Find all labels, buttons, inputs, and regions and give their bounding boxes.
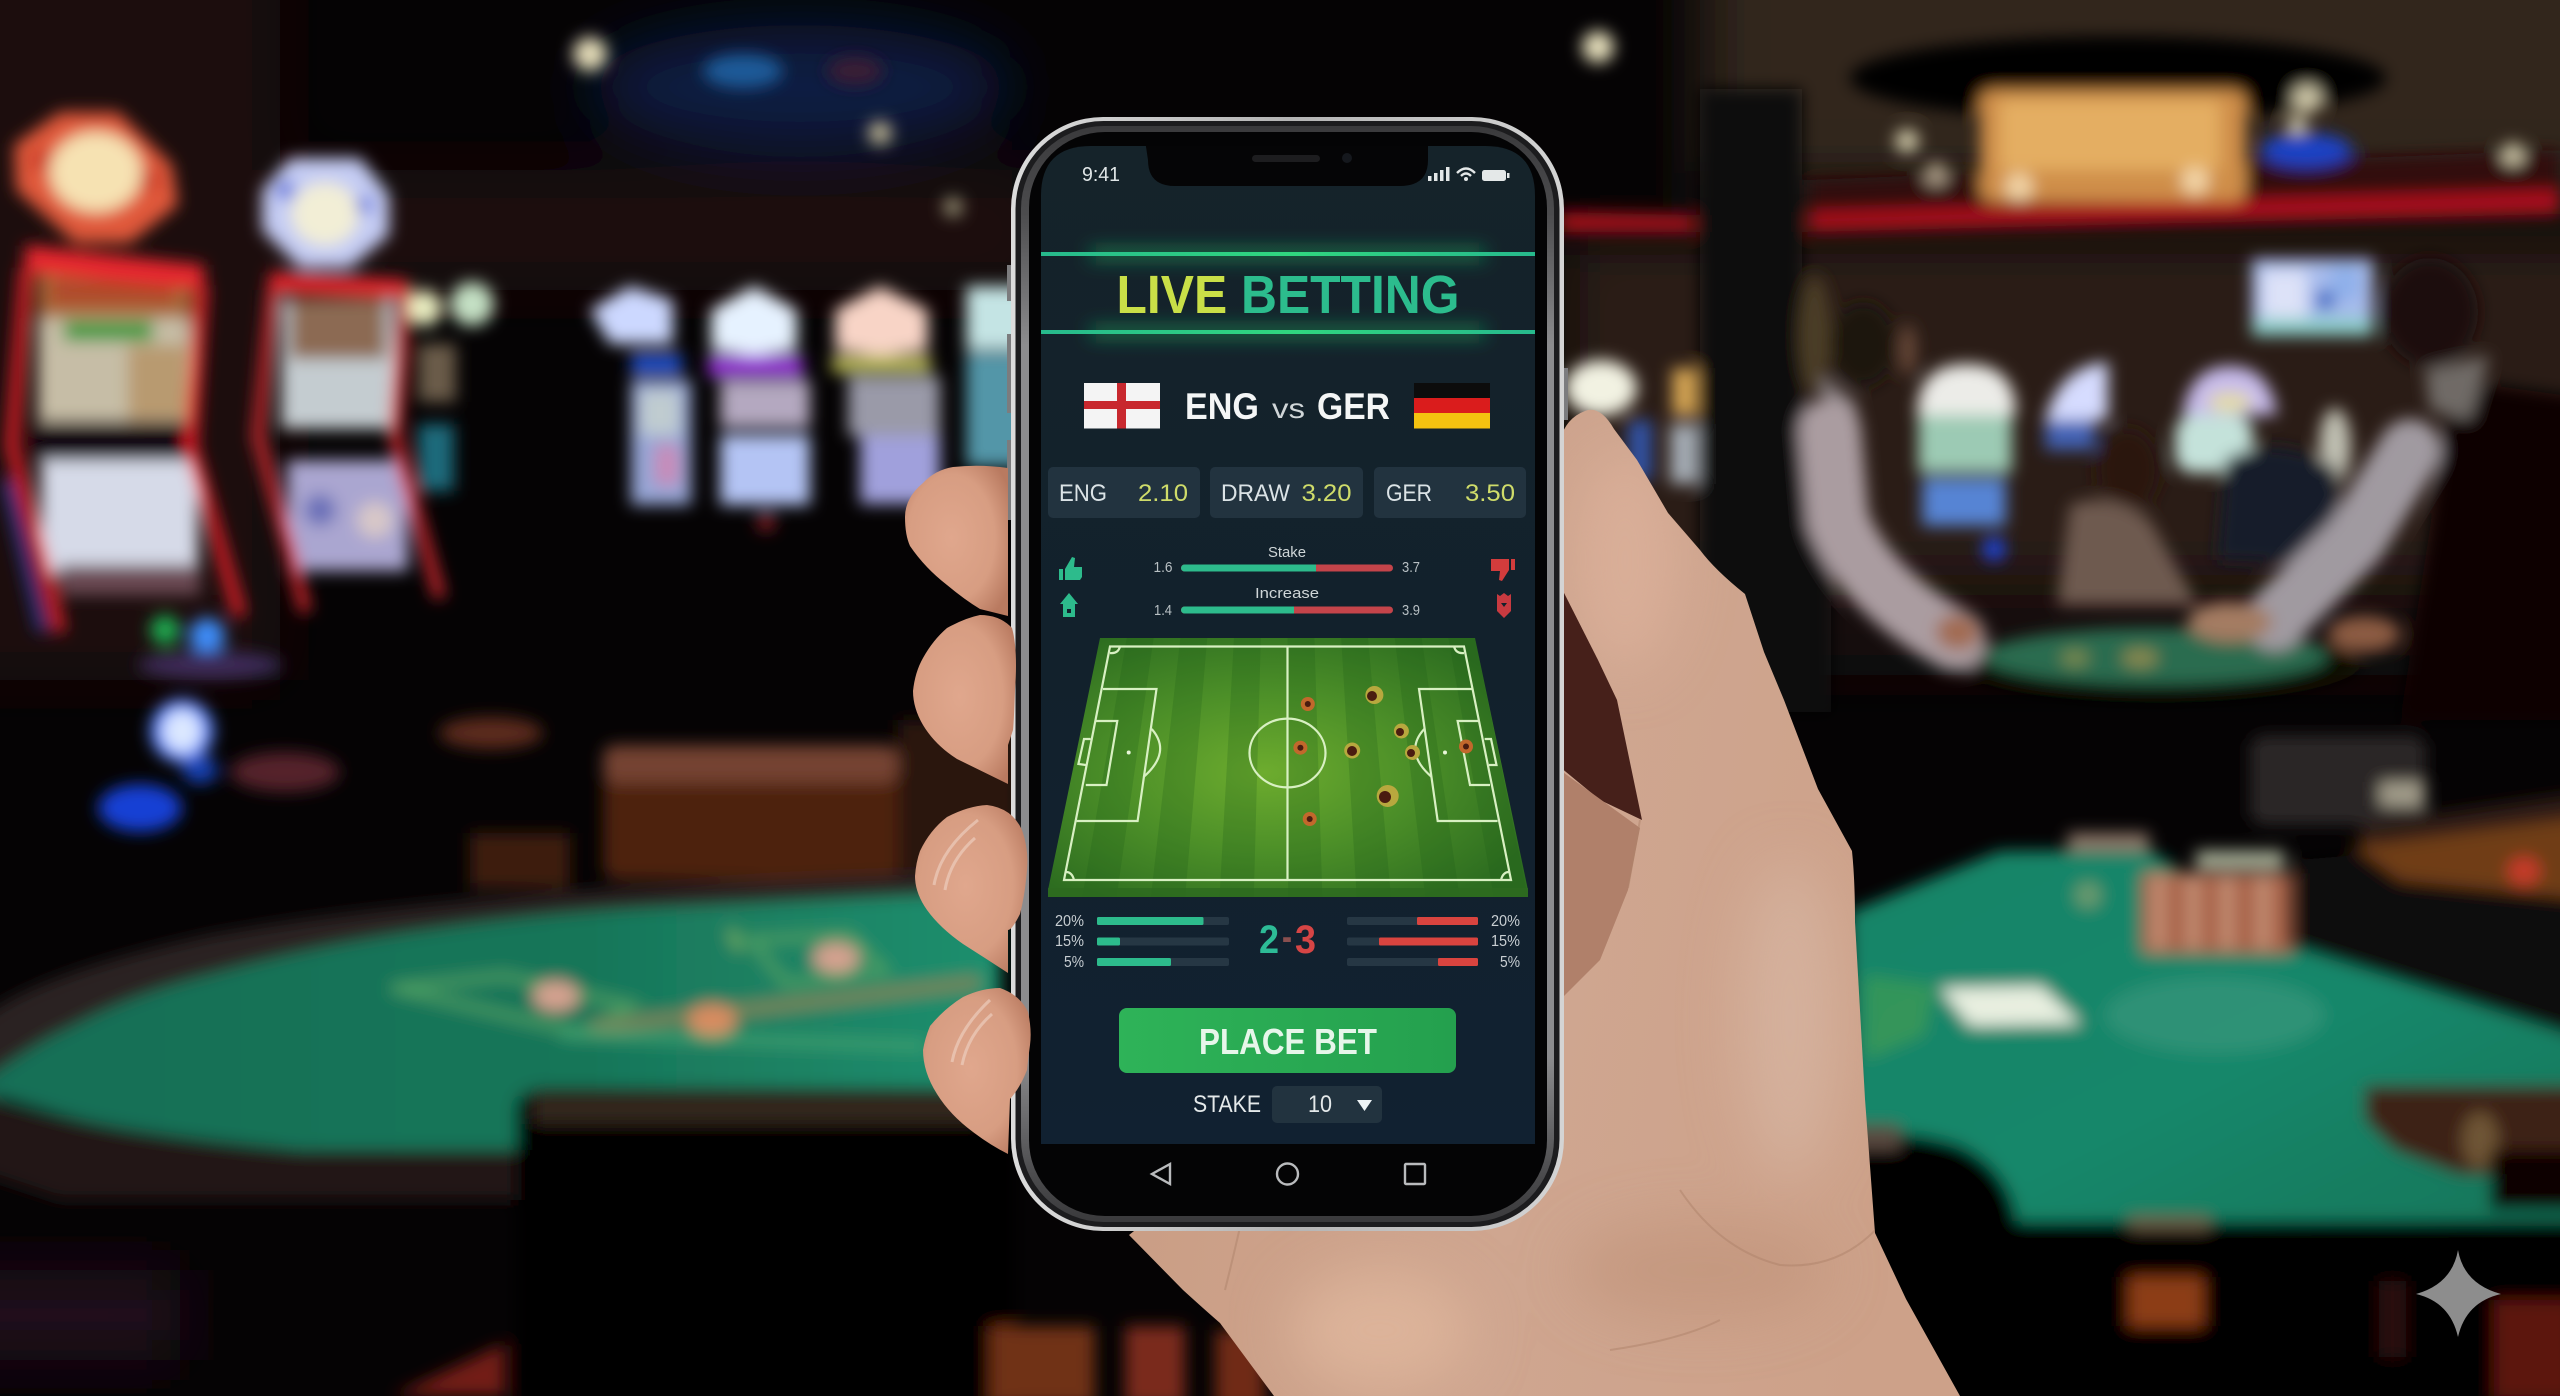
score	[1259, 915, 1316, 962]
red neon strip	[1560, 150, 2560, 232]
increase slider: 3.9	[1402, 602, 1420, 619]
players	[1293, 686, 1473, 826]
odds: Draw: 3.20	[1302, 480, 1352, 507]
left table rail	[0, 872, 1000, 1110]
icon: thumbs down	[1491, 559, 1515, 581]
ceiling spot lights	[573, 37, 963, 217]
dark ceiling recess	[1850, 36, 2386, 120]
felt betting lines	[392, 930, 980, 1046]
left table felt	[0, 892, 1000, 1150]
slot machine 4	[708, 286, 810, 531]
foreground chair left	[516, 1088, 1016, 1396]
notch	[1146, 146, 1428, 186]
right table felt	[1850, 850, 2560, 1225]
skin creases	[1225, 820, 1880, 1350]
icon: thumbs up	[1059, 557, 1082, 580]
odds: Draw	[1210, 467, 1363, 518]
seated woman	[2057, 428, 2198, 605]
odds: England	[1048, 467, 1200, 518]
slot arch 8	[2045, 362, 2108, 450]
ceiling lights right	[1582, 31, 2524, 186]
distant slot lights	[1565, 360, 1698, 484]
England flag	[1084, 383, 1160, 428]
watermark sparkle	[2416, 1250, 2501, 1337]
increase slider: Increase	[1255, 585, 1319, 602]
right stat bars	[1347, 913, 1520, 971]
blue floor lights	[98, 699, 218, 832]
dealer 1	[1751, 302, 1980, 712]
brown lounge chair	[603, 720, 1018, 885]
glass items	[2250, 735, 2426, 825]
ceiling blue light	[703, 54, 783, 88]
side lights and dim machine	[406, 282, 494, 491]
title: LIVE BETTING	[1116, 265, 1460, 325]
place bet button: PLACE BET	[1199, 1021, 1377, 1062]
background table	[1960, 628, 2360, 701]
place bet button	[1119, 1008, 1456, 1073]
pitch markings	[1064, 646, 1511, 880]
fingertip creases	[934, 820, 992, 1065]
palm shading	[1290, 450, 1840, 1390]
stake selector: STAKE	[1193, 1091, 1261, 1118]
left stat bars: 15%	[1055, 933, 1084, 950]
status time: 9:41	[1082, 164, 1120, 186]
stake slider: 3.7	[1402, 559, 1420, 576]
wedge between thumb and palm	[1560, 585, 1642, 820]
odds: Germany	[1374, 467, 1526, 518]
status icons	[1428, 167, 1510, 181]
floor glows	[393, 1326, 1265, 1396]
finger 2	[913, 615, 1016, 784]
right stat bars: 5%	[1500, 954, 1520, 971]
foreground round chair	[1850, 1134, 2018, 1225]
button lights	[138, 615, 282, 679]
finger 1	[905, 466, 1008, 616]
slot machine 6	[966, 286, 1036, 467]
ceiling purple light	[827, 57, 883, 85]
chandelier	[1980, 90, 2246, 202]
match heading: GER	[1317, 386, 1390, 427]
icon: red shield	[1497, 593, 1511, 618]
stake selector: 10	[1308, 1091, 1332, 1118]
odds: England: ENG	[1059, 480, 1107, 507]
brown tray lower right	[2365, 1086, 2560, 1210]
left table lower rail	[0, 1095, 560, 1200]
stake slider: Stake	[1268, 544, 1306, 561]
dark pillar	[1700, 89, 1802, 709]
casino chips on left table	[533, 943, 859, 1036]
title lines	[1041, 252, 1535, 334]
match heading	[1185, 386, 1390, 427]
left stat bars: 5%	[1064, 954, 1084, 971]
fingers	[905, 466, 1031, 1154]
odds: Germany: 3.50	[1465, 480, 1515, 507]
slot machine 1	[6, 245, 240, 632]
icon: green arrow	[1060, 593, 1078, 617]
chips stack	[2142, 873, 2292, 953]
score: 3	[1295, 918, 1316, 962]
floor glows right	[2129, 1277, 2560, 1396]
slot arch 7	[1917, 364, 2016, 561]
slot machine 1 sign	[14, 112, 178, 243]
roulette table	[2298, 790, 2560, 1045]
palm below thumb fold	[1560, 770, 1640, 1000]
increase slider	[1154, 585, 1420, 619]
table front rail	[1850, 1216, 2560, 1396]
score: -	[1282, 915, 1292, 959]
maroon lounge seats	[230, 717, 570, 888]
phone body rim	[1011, 117, 1564, 1231]
match heading: ENG	[1185, 386, 1259, 427]
slot arch 9	[2175, 366, 2351, 484]
white paper on table	[1940, 986, 2081, 1026]
stake selector	[1193, 1086, 1382, 1123]
green felt lines right	[1865, 975, 1935, 1060]
navigation bar icons	[1152, 1164, 1425, 1184]
right stat bars: 15%	[1491, 933, 1520, 950]
finger 4	[923, 988, 1031, 1154]
odds: Draw: DRAW	[1221, 480, 1290, 507]
slot machine 2	[258, 272, 440, 612]
felt highlight	[2105, 977, 2325, 1053]
match heading: vs	[1272, 393, 1305, 424]
title glow	[1090, 248, 1485, 338]
slot machine 2 sign	[262, 158, 389, 268]
TV screen	[2252, 259, 2373, 336]
tan column behind dealer	[1799, 275, 1831, 395]
tan rail on chair	[1850, 1125, 1900, 1149]
hand palm and thumb	[1100, 400, 2000, 1396]
blue ceiling ellipse	[2260, 133, 2352, 167]
pitch stripes	[1082, 638, 1528, 897]
seated person in navy	[2217, 447, 2338, 565]
football pitch	[1048, 638, 1528, 897]
top chip piles	[2068, 833, 2284, 908]
Germany flag	[1414, 383, 1490, 428]
stake slider	[1154, 544, 1420, 576]
pitch front edge	[1048, 888, 1528, 897]
odds: England: 2.10	[1138, 480, 1188, 507]
slot machine 5	[832, 286, 940, 504]
increase slider: 1.4	[1154, 602, 1172, 619]
odds: Germany: GER	[1386, 480, 1432, 507]
right stat bars: 20%	[1491, 913, 1520, 930]
dealer 2	[2188, 258, 2560, 720]
stake slider: 1.6	[1154, 559, 1172, 576]
left stat bars	[1055, 913, 1229, 971]
left stat bars: 20%	[1055, 913, 1084, 930]
slot machine 3	[590, 286, 691, 505]
penalty spots	[1127, 750, 1447, 754]
score: 2	[1259, 918, 1279, 962]
phone	[1007, 117, 1568, 1231]
phone side buttons	[1007, 265, 1568, 520]
finger 3	[915, 805, 1027, 973]
screen	[1041, 140, 1535, 1144]
